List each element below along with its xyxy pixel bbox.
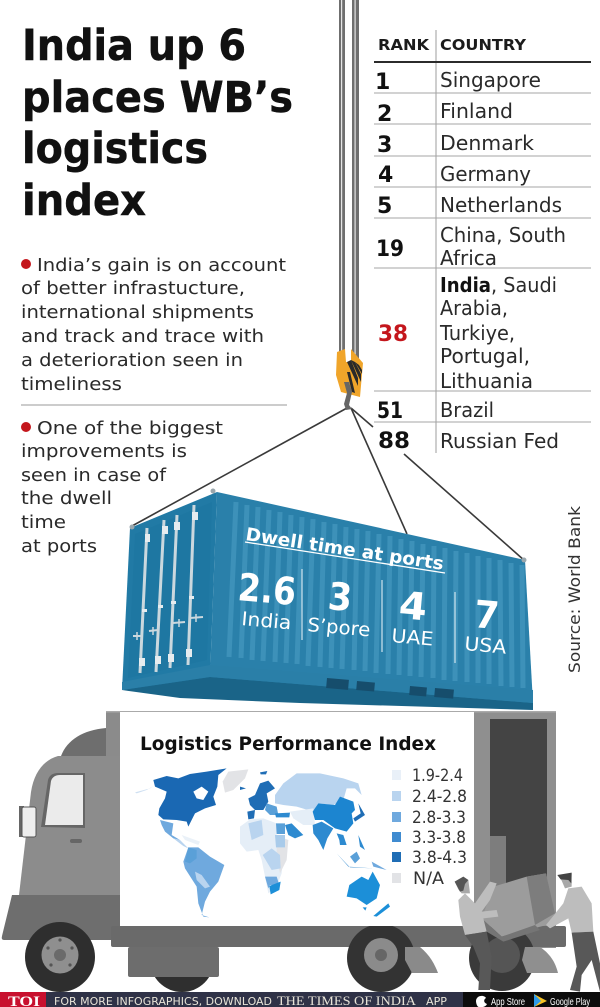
panel: logistics performance index: [120, 712, 474, 926]
title: places WB’s: [22, 73, 293, 123]
table header: COUNTRY: [440, 36, 527, 54]
container side wall: [210, 492, 533, 703]
text block: India's gain: and track and trace with: [21, 326, 264, 347]
text block: dwell time improvement: improvements is: [21, 441, 187, 462]
stat: USA 7: 7: [472, 592, 501, 638]
table rows: 88: [378, 429, 410, 454]
cardboard box: [482, 873, 555, 942]
map legend: [392, 766, 467, 889]
container door bars: [133, 505, 203, 673]
table: logistics ranking: [374, 30, 591, 454]
table rows: Turkiye,: [439, 321, 515, 345]
text block: India's gain: timeliness: [21, 374, 122, 395]
google play badge: [534, 994, 591, 1007]
text block: India's gain: a deterioration seen in: [21, 350, 243, 371]
stat: Singapore 3: [307, 574, 371, 641]
stat: USA 7: USA: [464, 633, 507, 659]
container bottom rail: [122, 665, 533, 703]
stat: India 2.6: India: [241, 608, 292, 634]
heading: dwell time at ports: Dwell time at ports: [244, 524, 445, 575]
stat: India 2.6: 2.6: [236, 565, 298, 614]
table rows: 3: [377, 133, 392, 158]
table rows: Africa: [440, 246, 497, 270]
container fork pockets: [326, 678, 454, 699]
text block: dwell time improvement: time: [21, 512, 66, 533]
TOI logo: [0, 992, 46, 1007]
map legend: 3.8-4.3: [412, 848, 467, 868]
table rows: India: [440, 273, 491, 297]
truck cargo box frame: [106, 711, 556, 948]
table rows: 5: [377, 194, 392, 219]
table rows: 2: [377, 102, 392, 127]
map legend: 1.9-2.4: [412, 766, 463, 786]
map legend: 2.8-3.3: [412, 808, 466, 828]
workers carrying box: [455, 873, 600, 992]
container door latches: [139, 512, 198, 666]
table rows: Brazil: [440, 398, 494, 422]
table header: [378, 36, 527, 54]
stat: UAE 4: [391, 583, 434, 651]
table rows: Russian Fed: [440, 429, 559, 453]
footer banner: [0, 992, 600, 1007]
truck rear wheels: [347, 924, 558, 992]
stat: USA 7: [464, 592, 507, 659]
map title: Logistics Performance Index: [140, 733, 436, 755]
truck cab: [2, 728, 120, 940]
world map: [135, 768, 390, 917]
table rows: China, South: [440, 223, 566, 247]
left worker: [455, 877, 498, 990]
download prompt: [54, 993, 447, 1007]
text block: India's gain: [21, 255, 286, 395]
map legend: 2.4-2.8: [412, 787, 467, 807]
container door face: [122, 492, 217, 690]
crane hook: [336, 349, 363, 410]
table header: RANK: [378, 36, 430, 54]
stat: India 2.6: [236, 565, 298, 634]
container underside: [122, 672, 533, 710]
table rows: 38: [378, 322, 408, 347]
table rows: 19: [376, 237, 404, 262]
truck front wheel: [25, 922, 95, 992]
title: India up 6: [22, 21, 246, 71]
shipping container: [122, 488, 533, 710]
table rows: Singapore: [440, 68, 541, 92]
map legend: N/A: [413, 869, 444, 889]
text block: India's gain: international shipments: [21, 302, 254, 323]
truck chassis beam and tank: [111, 926, 566, 977]
table rows: Denmark: [440, 131, 534, 155]
text block: India's gain: of better infrastucture,: [21, 278, 245, 299]
container corrugation ribs: [229, 502, 523, 688]
app store badge: [476, 996, 525, 1007]
table rows: , Saudi: [491, 273, 557, 297]
table rows: [375, 68, 566, 454]
stat: Singapore 3: 3: [326, 574, 354, 620]
container corner castings: [130, 488, 526, 562]
table rows: 51: [377, 399, 403, 424]
table rows: Lithuania: [440, 369, 533, 393]
stat: Singapore 3: S’pore: [307, 614, 371, 641]
ropes from hook to container: [132, 408, 525, 561]
stat: UAE 4: UAE: [391, 625, 434, 651]
table rows: 4: [378, 163, 393, 188]
table rows: Germany: [440, 162, 531, 186]
table rows: Arabia,: [440, 296, 508, 320]
table rows: Finland: [440, 99, 513, 123]
table rows: Netherlands: [440, 193, 562, 217]
right worker: [546, 873, 600, 992]
title: logistics: [22, 124, 208, 174]
text block: dwell time improvement: the dwell: [21, 488, 112, 509]
crane cables: [339, 0, 359, 362]
text block: dwell time improvement: [21, 418, 223, 557]
truck: [2, 711, 566, 992]
title: [22, 21, 293, 226]
stat: UAE 4: 4: [397, 583, 429, 629]
text block: dwell time improvement: at ports: [21, 536, 97, 557]
title: index: [22, 176, 146, 226]
map legend: 3.3-3.8: [412, 828, 466, 848]
truck middle wheel: [150, 928, 214, 992]
text block: dwell time improvement: One of the biggest: [37, 418, 223, 439]
text block: dwell time improvement: seen in case of: [21, 465, 167, 486]
table rows: 1: [375, 70, 390, 95]
table rows: Portugal,: [440, 344, 530, 368]
text block: India's gain: India’s gain is on account: [37, 255, 286, 276]
source note: Source: World Bank: [565, 505, 584, 673]
